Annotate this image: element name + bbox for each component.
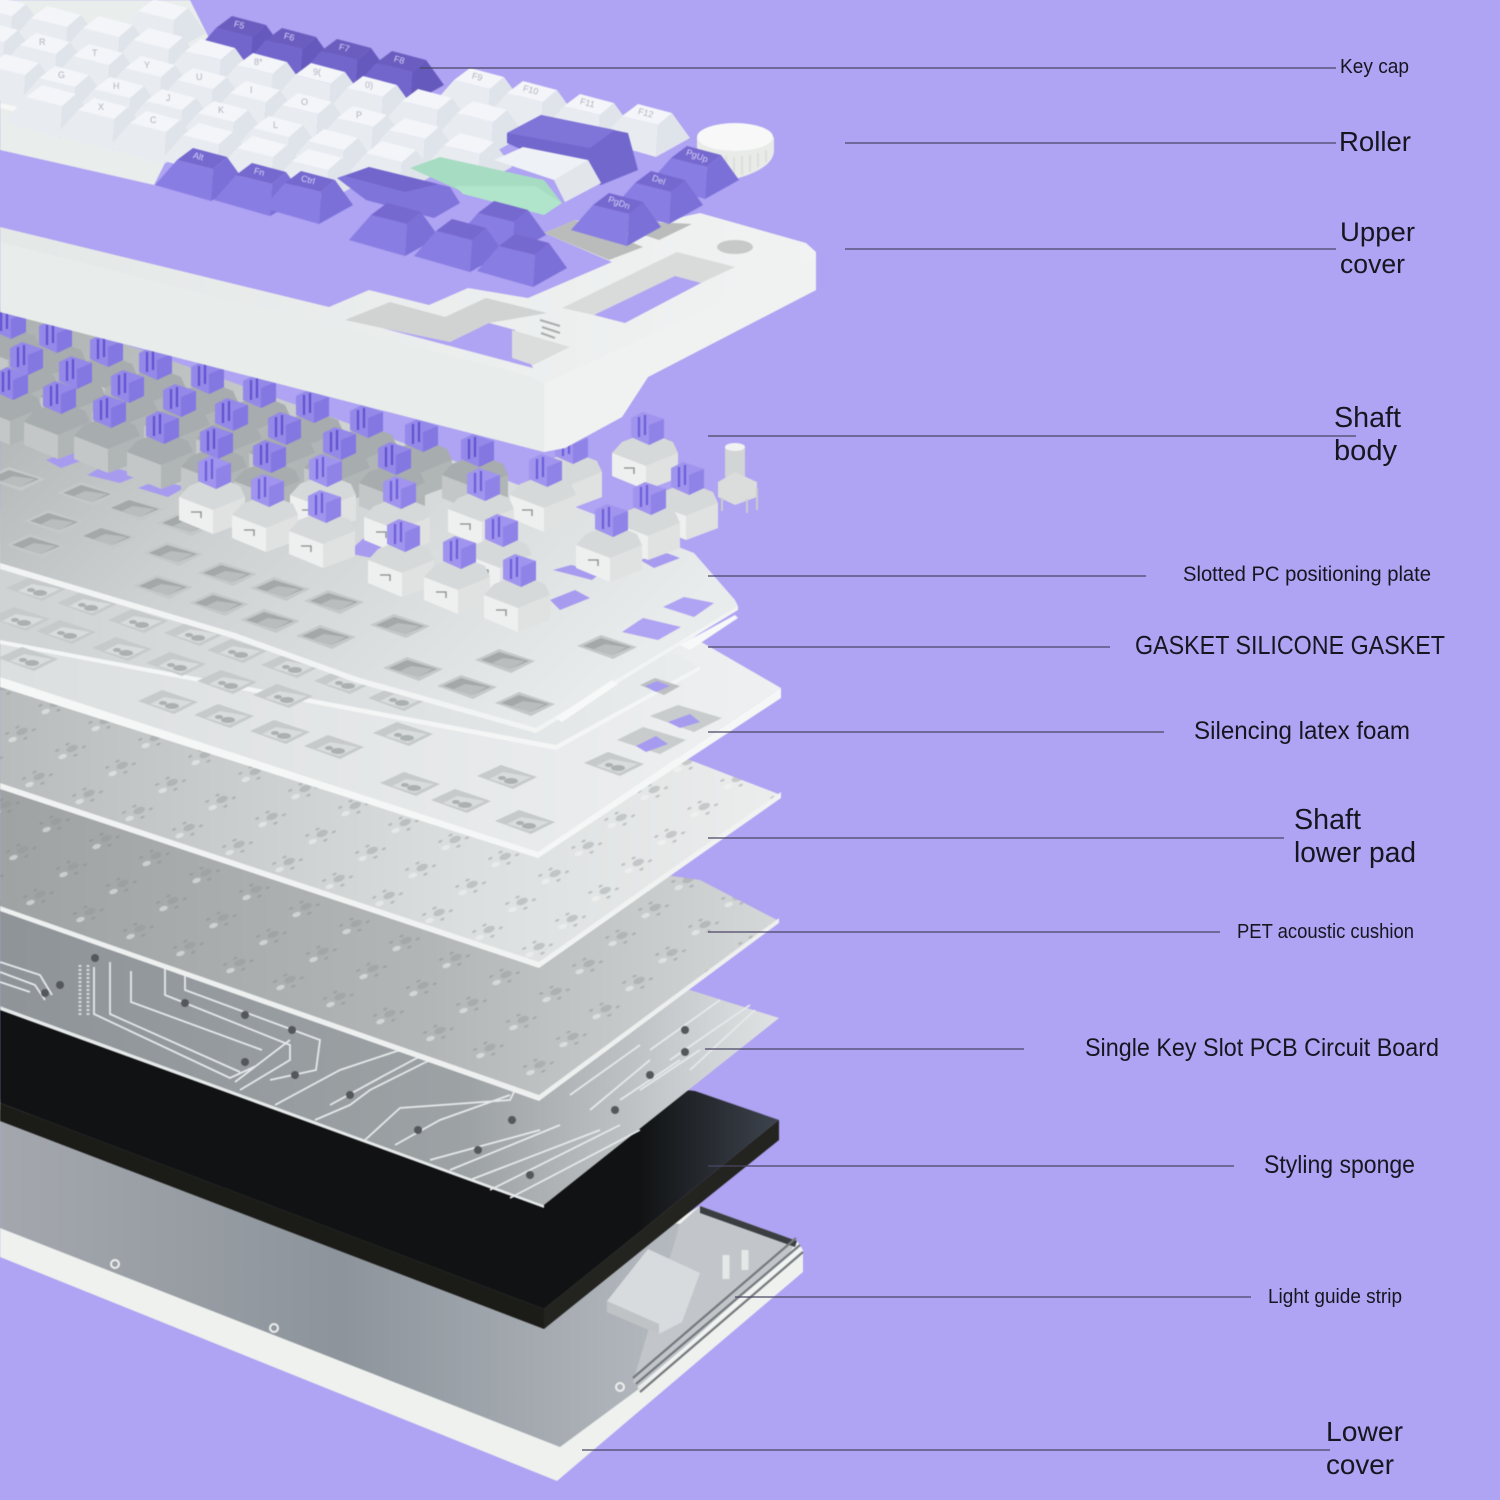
- keycap legends: 0): [365, 80, 373, 90]
- layer: PET acoustic cushion: [0, 780, 779, 1101]
- keycap legends: K: [218, 105, 224, 115]
- keycap legends: U: [196, 72, 202, 82]
- keycap legends: [39, 19, 709, 211]
- keycap legends: F8: [393, 54, 406, 66]
- label: Shaft lower pad: lower pad: [1294, 837, 1416, 869]
- label: Single Key Slot PCB Circuit Board: Single Key Slot PCB Circuit Board: [1085, 1034, 1439, 1062]
- label: Upper cover: [845, 217, 1415, 279]
- keycap legends: F12: [637, 106, 655, 120]
- layer: shaft lower pad: [0, 650, 781, 968]
- layer: silencing latex foam: [0, 540, 781, 858]
- label: Shaft body: [708, 402, 1401, 467]
- key: enter (green): [410, 157, 562, 215]
- icon: rotary encoder: [718, 443, 757, 513]
- label: GASKET SILICONE GASKET: GASKET SILICONE GASKET: [1135, 630, 1445, 660]
- label: PET acoustic cushion: PET acoustic cushion: [1237, 921, 1414, 943]
- label: Light guide strip: Light guide strip: [1268, 1286, 1402, 1308]
- layer: styling sponge: [0, 1006, 779, 1329]
- label: Lower cover: [582, 1416, 1403, 1480]
- label: Shaft lower pad: Shaft: [1294, 804, 1361, 836]
- keycap legends: F5: [233, 19, 246, 31]
- keycap legends: Del: [651, 173, 667, 187]
- layer: PCB circuit board: [0, 900, 779, 1208]
- label: Lower cover: cover: [1326, 1449, 1394, 1480]
- key: shift: [337, 167, 460, 218]
- keycap legends: I: [250, 85, 253, 95]
- label: Upper cover: Upper: [1340, 217, 1415, 247]
- keycap legends: G: [58, 70, 65, 80]
- keycap legends: P: [356, 110, 362, 120]
- label: Key cap: Key cap: [1340, 56, 1409, 78]
- key: backslash: [494, 147, 601, 202]
- keycap legends: F10: [522, 83, 540, 97]
- layer: gasket silicone gasket: [0, 510, 700, 750]
- label: Styling sponge: Styling sponge: [1264, 1151, 1415, 1179]
- keycap legends: PgUp: [685, 147, 709, 164]
- light guide box: [607, 1249, 700, 1334]
- keycap legends: 8*: [254, 57, 263, 67]
- keycap legends: F11: [579, 96, 596, 110]
- label: Slotted PC positioning plate: Slotted PC positioning plate: [1183, 563, 1431, 586]
- icon: roller knob: [697, 123, 774, 180]
- key: backspace: [507, 115, 638, 185]
- keycap legends: R: [39, 37, 46, 47]
- keycap legends: F7: [338, 42, 351, 54]
- label: Roller: Roller: [1339, 126, 1411, 157]
- keycap legends: Y: [144, 60, 150, 70]
- keycap legends: O: [301, 97, 308, 107]
- label: Upper cover: cover: [1340, 249, 1405, 279]
- keycap legends: J: [166, 93, 170, 103]
- label: Shaft body: body: [1334, 435, 1397, 467]
- keycaps: [0, 0, 739, 287]
- keycap legends: H: [113, 81, 120, 91]
- keycap legends: T: [92, 48, 98, 58]
- layer: slotted PC positioning plate: [0, 300, 738, 733]
- keycap legends: X: [98, 102, 104, 112]
- label: Silencing latex foam: Silencing latex foam: [1194, 717, 1410, 745]
- keycap legends: L: [273, 120, 278, 130]
- keycap legends: 9(: [313, 67, 321, 77]
- keycap legends: Alt: [192, 150, 205, 163]
- light guide strip rails: [633, 1238, 803, 1392]
- layer: upper cover: [0, 213, 816, 452]
- keycap legends: Ctrl: [300, 173, 316, 186]
- label: Shaft body: Shaft: [1334, 402, 1401, 434]
- label: Shaft lower pad: [708, 804, 1416, 869]
- keycap legends: C: [150, 115, 157, 125]
- label: Lower cover: Lower: [1326, 1416, 1403, 1447]
- keycap legends: Fn: [253, 166, 266, 178]
- keycap legends: PgDn: [607, 194, 631, 211]
- layer: lower cover: [0, 1100, 803, 1481]
- switches: shaft body: [0, 306, 718, 632]
- keycap legends: F6: [283, 31, 296, 43]
- keycap legends: F9: [471, 71, 484, 83]
